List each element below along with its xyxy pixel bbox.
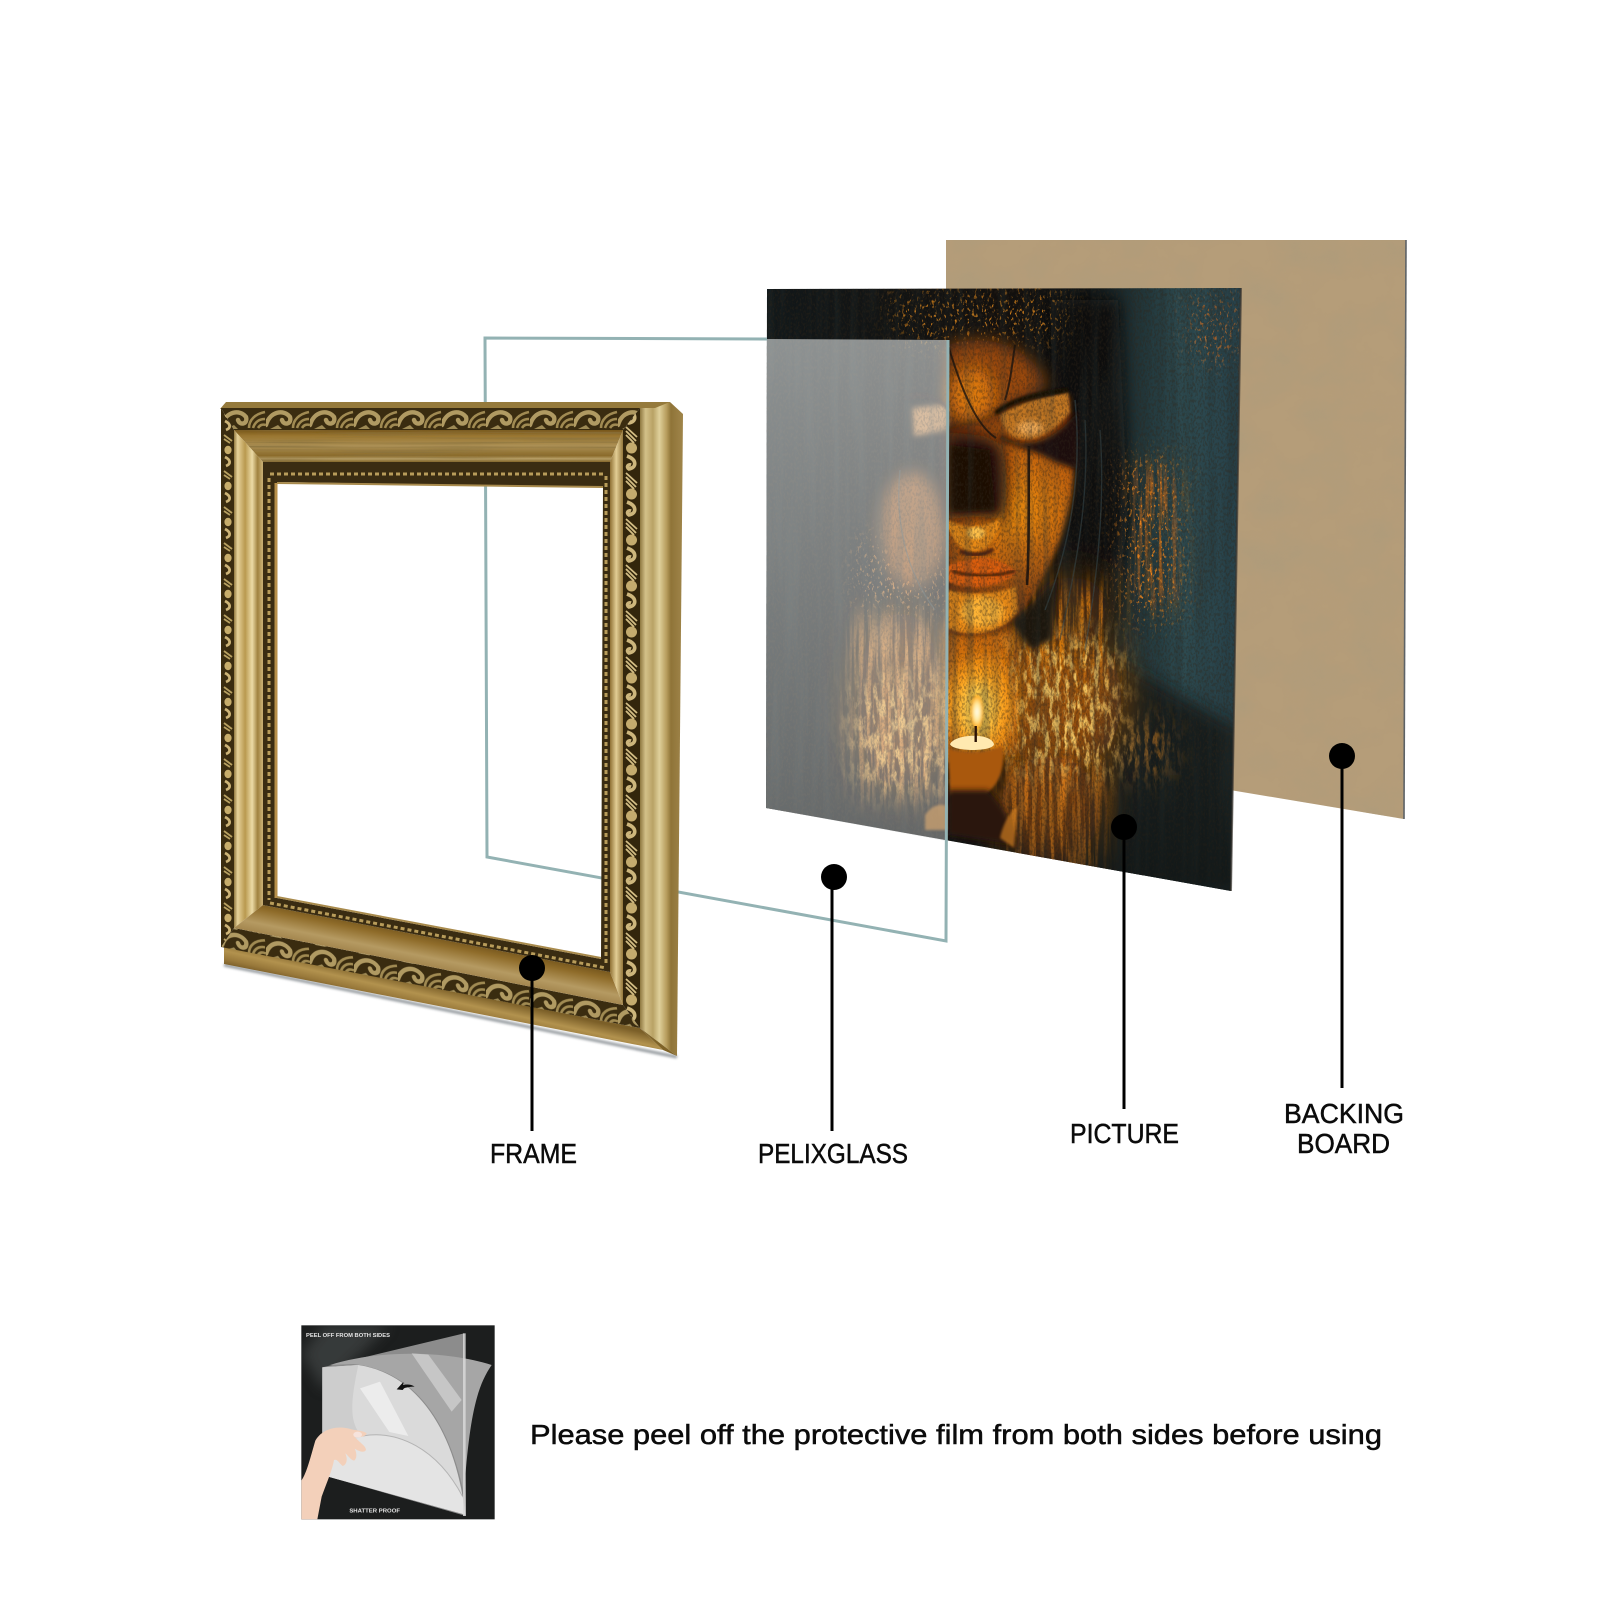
- frame bottom lip: [224, 947, 663, 1050]
- inner beaded band: [263, 462, 610, 972]
- panel: backing board: [946, 240, 1406, 819]
- nose: [948, 518, 1001, 552]
- label: pelixglass: PELIXGLASS: [758, 1138, 908, 1169]
- chin: [948, 586, 1018, 634]
- label: backing board: BACKING: [1284, 1098, 1404, 1129]
- eyebrow: [997, 390, 1066, 412]
- golden flecks: [855, 640, 1165, 790]
- sparse paint flecks: [860, 292, 1238, 620]
- label: picture: PICTURE: [1070, 1118, 1179, 1149]
- label: backing board: [1284, 1098, 1404, 1159]
- moulding right: [610, 430, 623, 1005]
- label: frame: FRAME: [490, 1138, 577, 1169]
- ornament band left: [221, 408, 234, 947]
- hands: [948, 790, 1016, 845]
- lips: [948, 557, 1017, 587]
- film highlight: [360, 1382, 408, 1436]
- frame shadow edge: [224, 965, 677, 1057]
- dark hair mass: [1050, 300, 1128, 650]
- thumbnail: peeling protective film: [301, 1325, 495, 1519]
- callout: pelixglass marker: [821, 864, 847, 1131]
- candle glow: [946, 657, 1014, 753]
- panel: picture: [760, 285, 1250, 895]
- left face under glass: [880, 395, 948, 588]
- frame top lip: [220, 402, 670, 409]
- glass sheet behind: [322, 1333, 466, 1516]
- hand: [301, 1427, 367, 1519]
- film left strip: [322, 1365, 358, 1433]
- panel: pelixglass sheet: [485, 338, 948, 941]
- thumbnail caption top: PEEL OFF FROM BOTH SIDES: [306, 1333, 390, 1339]
- main film: [322, 1365, 465, 1515]
- forehead: [948, 340, 1048, 430]
- text: peel-off instruction: Please peel off the protective film from both sides before using: [530, 1419, 1382, 1450]
- lower right shadow: [1080, 664, 1234, 891]
- eyelid: [1000, 392, 1070, 439]
- peeled flap: [330, 1354, 492, 1494]
- label: backing board: BOARD: [1297, 1128, 1390, 1159]
- moulding bottom: [234, 905, 623, 1005]
- dark under eye: [1000, 410, 1078, 470]
- candle: [925, 695, 1018, 848]
- right face: [948, 345, 1078, 650]
- frame side face: [640, 402, 683, 1056]
- jaw shadow: [1012, 578, 1058, 650]
- texture streaks: [760, 285, 1250, 895]
- tear streak: [1027, 446, 1029, 585]
- ornament band bottom: [221, 928, 640, 1028]
- moulding top: [234, 430, 623, 462]
- hair over brow: [948, 345, 1015, 438]
- ornament band top: [221, 408, 640, 430]
- thumbnail caption bottom: SHATTER PROOF: [349, 1509, 401, 1515]
- picture edge shadow: [1231, 288, 1241, 891]
- callout: backing board marker: [1329, 743, 1355, 1088]
- moulding left: [234, 430, 263, 928]
- arrow icon: [397, 1382, 415, 1390]
- face shadow: [948, 432, 1007, 520]
- drip textures: [855, 470, 1172, 880]
- warm underpainting: [858, 576, 1122, 865]
- callout: frame marker: [519, 955, 545, 1131]
- callout: picture marker: [1111, 814, 1137, 1109]
- lower film curl: [322, 1435, 465, 1515]
- hair strands: [899, 400, 1102, 650]
- ornament band right: [623, 408, 640, 1028]
- paint grain: [760, 285, 1250, 895]
- panel: gold ornate frame: [220, 402, 683, 1057]
